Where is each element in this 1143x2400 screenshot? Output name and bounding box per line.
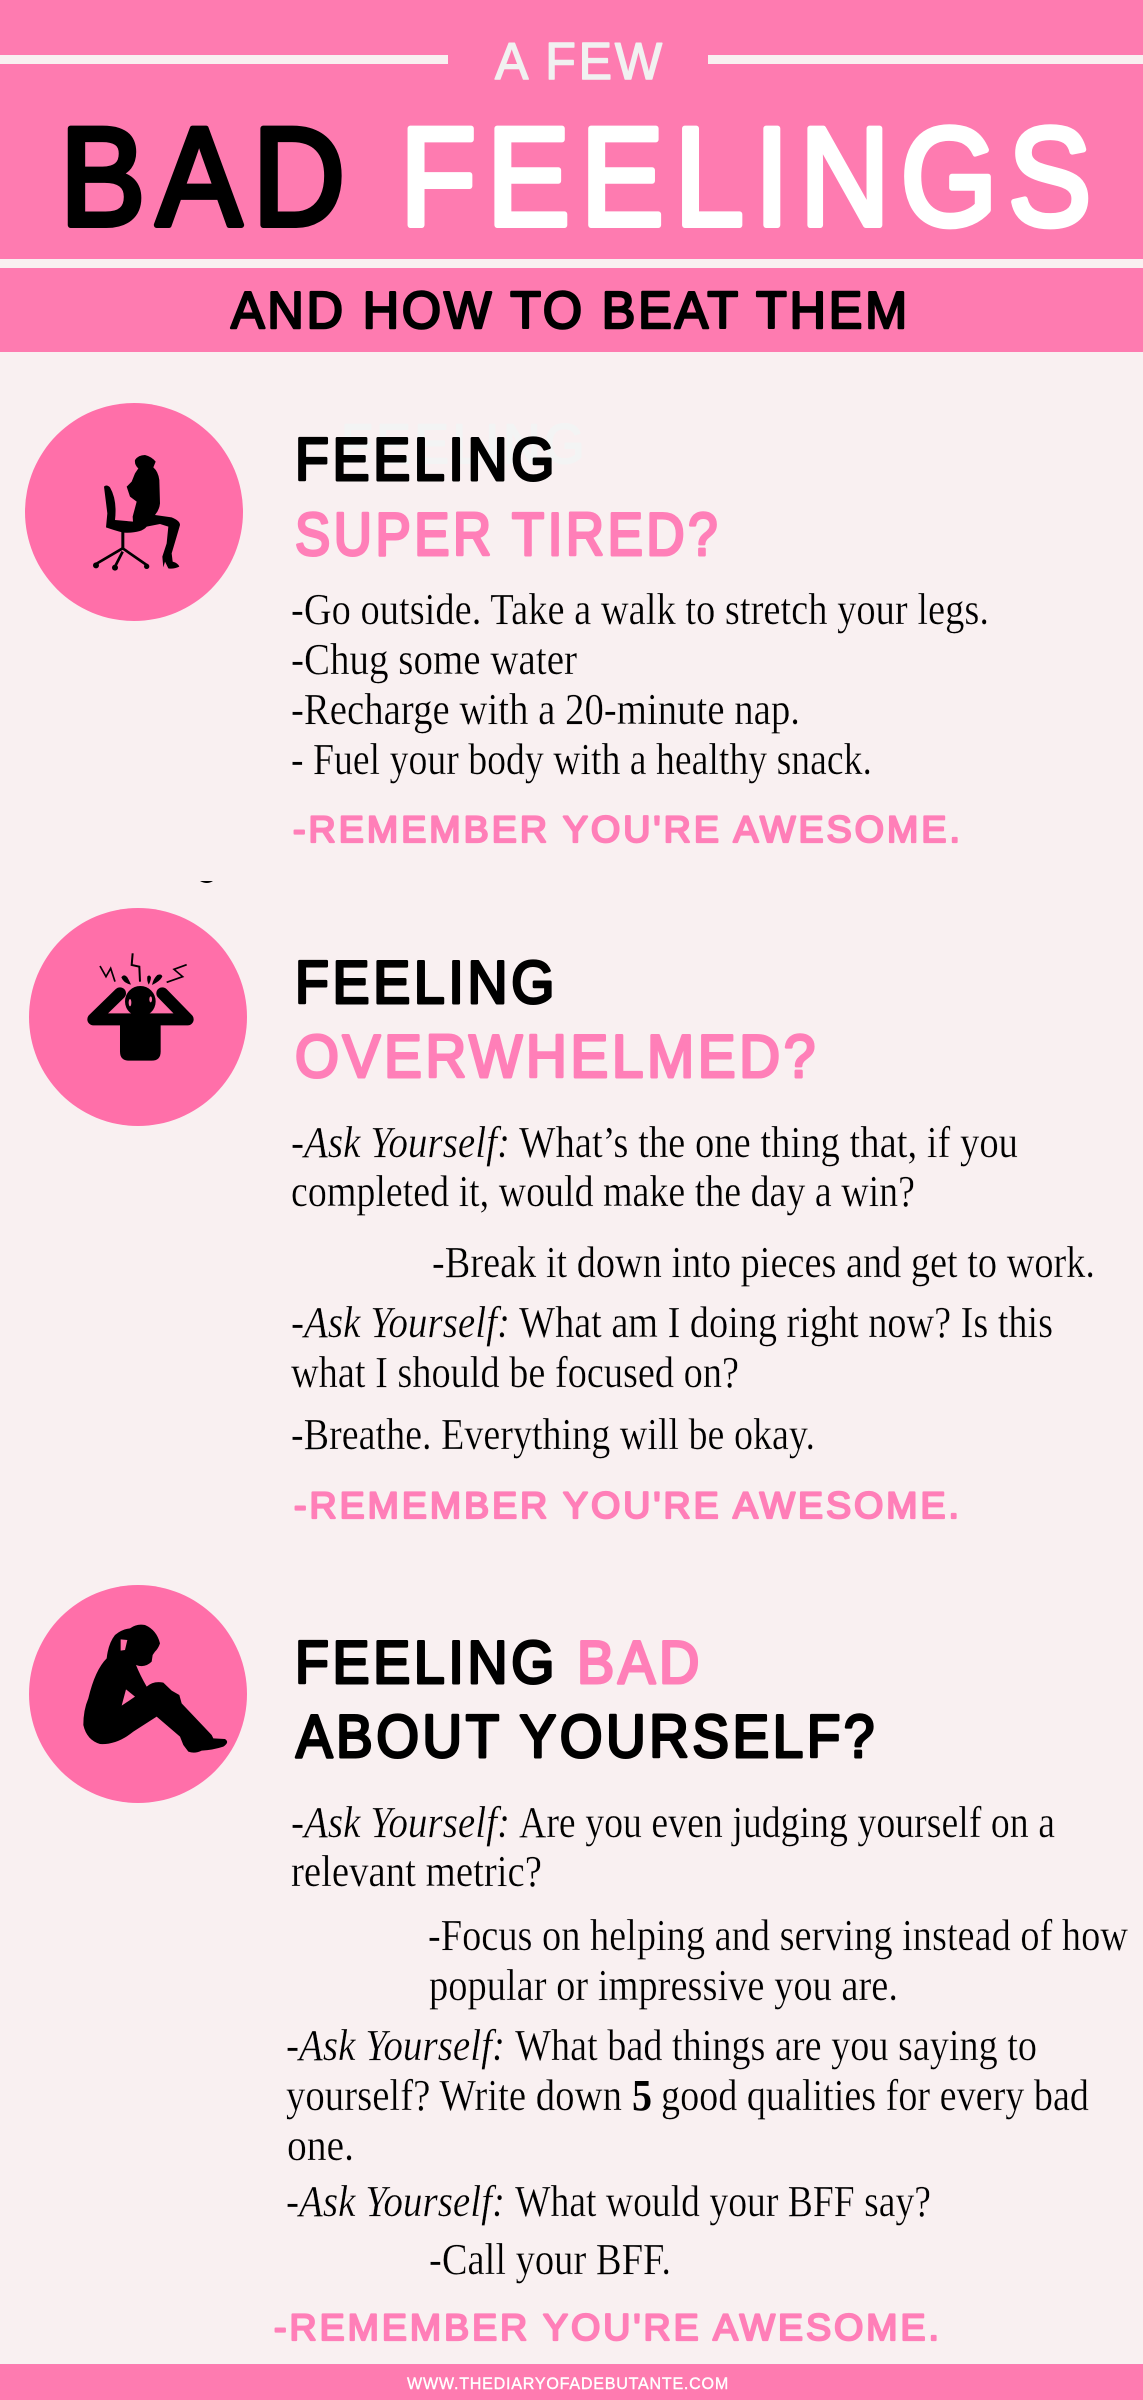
icon: woman sitting with head down — [29, 1585, 247, 1803]
tips list: one. — [287, 2121, 354, 2170]
icon: woman on office chair — [25, 403, 243, 621]
tips list: relevant metric? — [291, 1847, 542, 1896]
callout: remember: -REMEMBER YOU'RE AWESOME. — [294, 1485, 962, 1526]
panel: bad about yourself — [29, 1585, 1128, 2348]
tips list: -Call your BFF. — [429, 2235, 671, 2284]
heading: feeling bad — [295, 1629, 703, 1696]
tips list: What am I doing right now? Is this — [519, 1298, 1053, 1347]
faint ghost heading: FEELING — [341, 412, 588, 475]
heading: feeling: FEELING — [295, 426, 558, 493]
main title: bad: BAD — [60, 98, 356, 255]
tips list: -Ask Yourself: — [291, 1798, 510, 1847]
panel: overwhelmed — [29, 908, 1095, 1526]
heading: super tired: SUPER TIRED? — [295, 501, 721, 568]
tips list: What’s the one thing that, if you — [519, 1118, 1018, 1167]
icon: stressed person — [29, 908, 247, 1126]
tips list: -Ask Yourself: — [286, 2021, 505, 2070]
tips list: What would your BFF say? — [515, 2177, 931, 2226]
tips list — [286, 1798, 1128, 2284]
tips list: good qualities for every bad — [661, 2071, 1089, 2120]
tips list: Are you even judging yourself on a — [519, 1798, 1055, 1847]
tips list: What bad things are you saying to — [515, 2021, 1037, 2070]
heading: feeling: FEELING — [295, 949, 558, 1016]
website url: WWW.THEDIARYOFADEBUTANTE.COM — [407, 2374, 729, 2393]
tips list — [291, 585, 989, 784]
tips list: -Breathe. Everything will be okay. — [291, 1410, 815, 1459]
heading: overwhelmed: OVERWHELMED? — [295, 1023, 819, 1090]
tips list: completed it, would make the day a win? — [291, 1167, 915, 1216]
heading: feeling bad: FEELING — [295, 1629, 558, 1696]
tips list — [291, 1118, 1095, 1459]
tips list: 5 — [632, 2071, 652, 2120]
tips list: - Fuel your body with a healthy snack. — [291, 735, 872, 784]
tips list: -Recharge with a 20-minute nap. — [291, 685, 800, 734]
tips list: yourself? Write down — [286, 2071, 622, 2120]
tips list: -Ask Yourself: — [286, 2177, 505, 2226]
callout: remember: -REMEMBER YOU'RE AWESOME. — [293, 809, 963, 850]
panel: super tired — [25, 403, 989, 850]
footer band — [0, 2364, 1143, 2400]
callout: remember: -REMEMBER YOU'RE AWESOME. — [274, 2307, 942, 2348]
tips list: -Ask Yourself: — [291, 1118, 510, 1167]
header banner — [0, 0, 1143, 352]
tips list: -Go outside. Take a walk to stretch your legs. — [291, 585, 989, 634]
heading: feeling bad: BAD — [577, 1629, 703, 1696]
tips list: -Chug some water — [291, 635, 577, 684]
tips list: -Ask Yourself: — [291, 1298, 510, 1347]
tips list: what I should be focused on? — [291, 1348, 739, 1397]
title kicker: a few: A FEW — [495, 33, 665, 91]
heading: about yourself: ABOUT YOURSELF? — [296, 1703, 878, 1770]
subtitle: AND HOW TO BEAT THEM — [231, 282, 910, 340]
tips list: popular or impressive you are. — [429, 1961, 898, 2010]
small stray mark — [200, 881, 213, 883]
